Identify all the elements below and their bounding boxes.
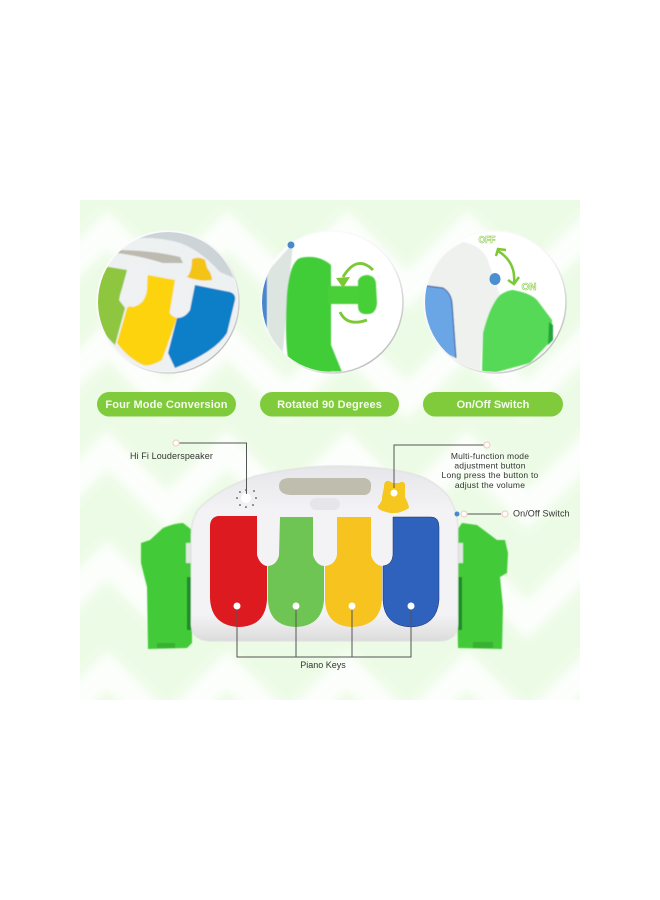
label pill bbox=[260, 392, 399, 416]
photo circle: power switch bbox=[420, 231, 566, 373]
icon: switch pin bbox=[288, 242, 294, 248]
background chevron pattern bbox=[80, 200, 580, 700]
left green leg bbox=[141, 523, 193, 649]
speaker grille bbox=[236, 489, 257, 508]
callout: multi-function button: Long press the button to bbox=[442, 470, 539, 480]
icon: switch arrow bbox=[496, 249, 519, 284]
ON label: ON bbox=[522, 282, 536, 293]
callout: on/off switch: On/Off Switch bbox=[513, 508, 570, 518]
red key bbox=[210, 516, 267, 627]
callout: Hi Fi speaker: Hi Fi Louderspeaker bbox=[130, 451, 213, 461]
main toy piano bbox=[141, 466, 508, 649]
photo circle: rotating knob bbox=[258, 231, 403, 373]
OFF label: OFF bbox=[478, 235, 496, 246]
callout: piano keys: Piano Keys bbox=[300, 660, 346, 670]
power pin bbox=[454, 512, 460, 516]
label pill: Four Mode Conversion bbox=[105, 399, 228, 411]
panel: four mode conversion bbox=[96, 230, 240, 416]
callout: multi-function button: adjustment button bbox=[454, 460, 526, 470]
handle slot bbox=[279, 478, 371, 495]
right green leg bbox=[457, 523, 508, 649]
label pill: Rotated 90 Degrees bbox=[277, 399, 382, 411]
mode dial on panel bbox=[310, 498, 340, 510]
piano body bbox=[191, 466, 458, 641]
blue key bbox=[383, 517, 439, 627]
icon: rotation arrowhead bbox=[336, 277, 350, 288]
callout: multi-function button: Multi-function mode bbox=[451, 451, 529, 461]
icon: switch knob bbox=[490, 273, 500, 285]
callout: multi-function button: adjust the volume bbox=[455, 480, 525, 490]
panel: on/off switch bbox=[420, 231, 566, 416]
callout lines bbox=[179, 443, 501, 657]
panel: rotated 90 degrees bbox=[258, 231, 403, 416]
yellow mode button bbox=[378, 481, 409, 513]
label pill: On/Off Switch bbox=[457, 399, 530, 411]
yellow key bbox=[325, 517, 382, 627]
callout dots bbox=[173, 440, 508, 610]
green key bbox=[268, 517, 324, 627]
photo circle: piano key close-up bbox=[96, 230, 240, 374]
label pill bbox=[97, 392, 236, 416]
label pill bbox=[423, 392, 563, 416]
icon: rotation arrows bbox=[340, 263, 373, 322]
